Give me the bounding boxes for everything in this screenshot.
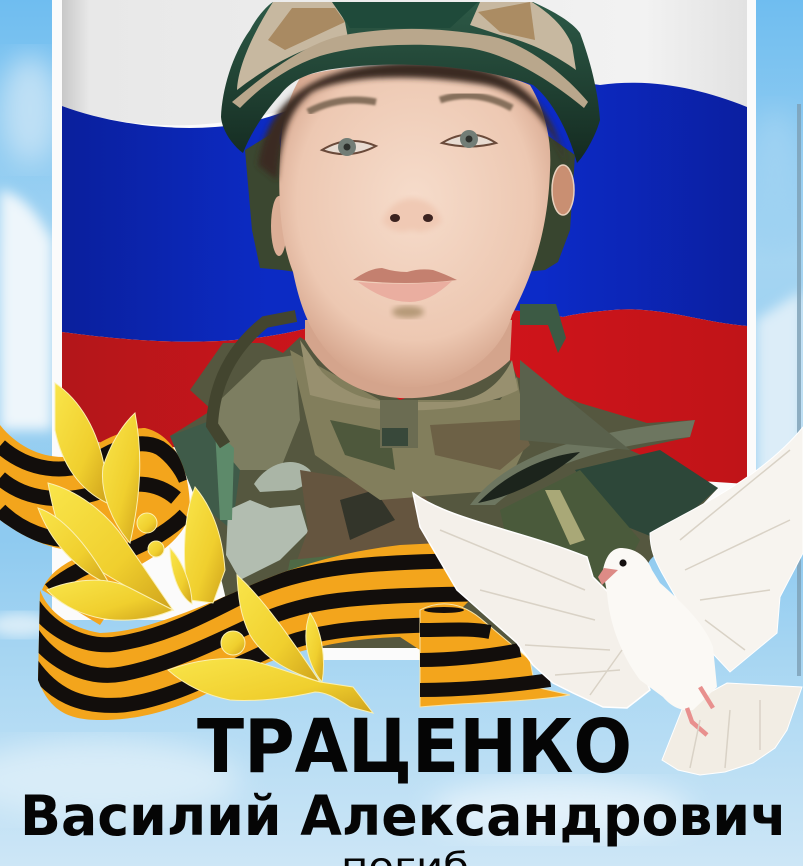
left side of head: [245, 130, 296, 272]
name: given name and patronymic: Василий Александрович: [20, 784, 787, 848]
neck: [305, 320, 512, 398]
laurel branches: [38, 383, 373, 713]
dove: left wing: [413, 493, 650, 708]
dove: feather lines: [440, 450, 790, 768]
left helmet strap: [212, 316, 296, 445]
right side of head: [525, 130, 575, 272]
portrait: soldier: [170, 2, 718, 648]
nose: [382, 198, 442, 232]
camouflage patches: [170, 340, 718, 620]
dove: right wing: [650, 427, 803, 672]
right eye: [442, 130, 496, 148]
dove: tail: [662, 683, 802, 775]
russian flag: [62, 0, 747, 484]
uniform jacket: [170, 337, 718, 648]
white dove: [413, 427, 803, 775]
dove: feet: [687, 687, 713, 735]
right ear: [552, 165, 574, 215]
forehead hair shadow: [258, 62, 566, 180]
st george ribbon: [0, 420, 570, 725]
dove: body: [603, 548, 717, 710]
name: surname: ТРАЦЕНКО: [197, 704, 632, 790]
dove: beak: [598, 568, 618, 585]
face: [279, 66, 550, 387]
helmet: [221, 2, 600, 163]
ribbon: left loop: [0, 420, 195, 630]
right helmet strap: [520, 304, 566, 353]
scrollbar-like grey strip at right edge: [797, 104, 801, 676]
dove: eye: [619, 559, 627, 567]
eyebrows: [308, 96, 512, 112]
left ear: [271, 196, 287, 256]
white panel behind flag: [52, 0, 756, 660]
ribbon: right tail: [420, 604, 570, 707]
ribbon: main band: [30, 540, 475, 725]
left eye: [322, 138, 376, 156]
mouth: [353, 268, 457, 318]
